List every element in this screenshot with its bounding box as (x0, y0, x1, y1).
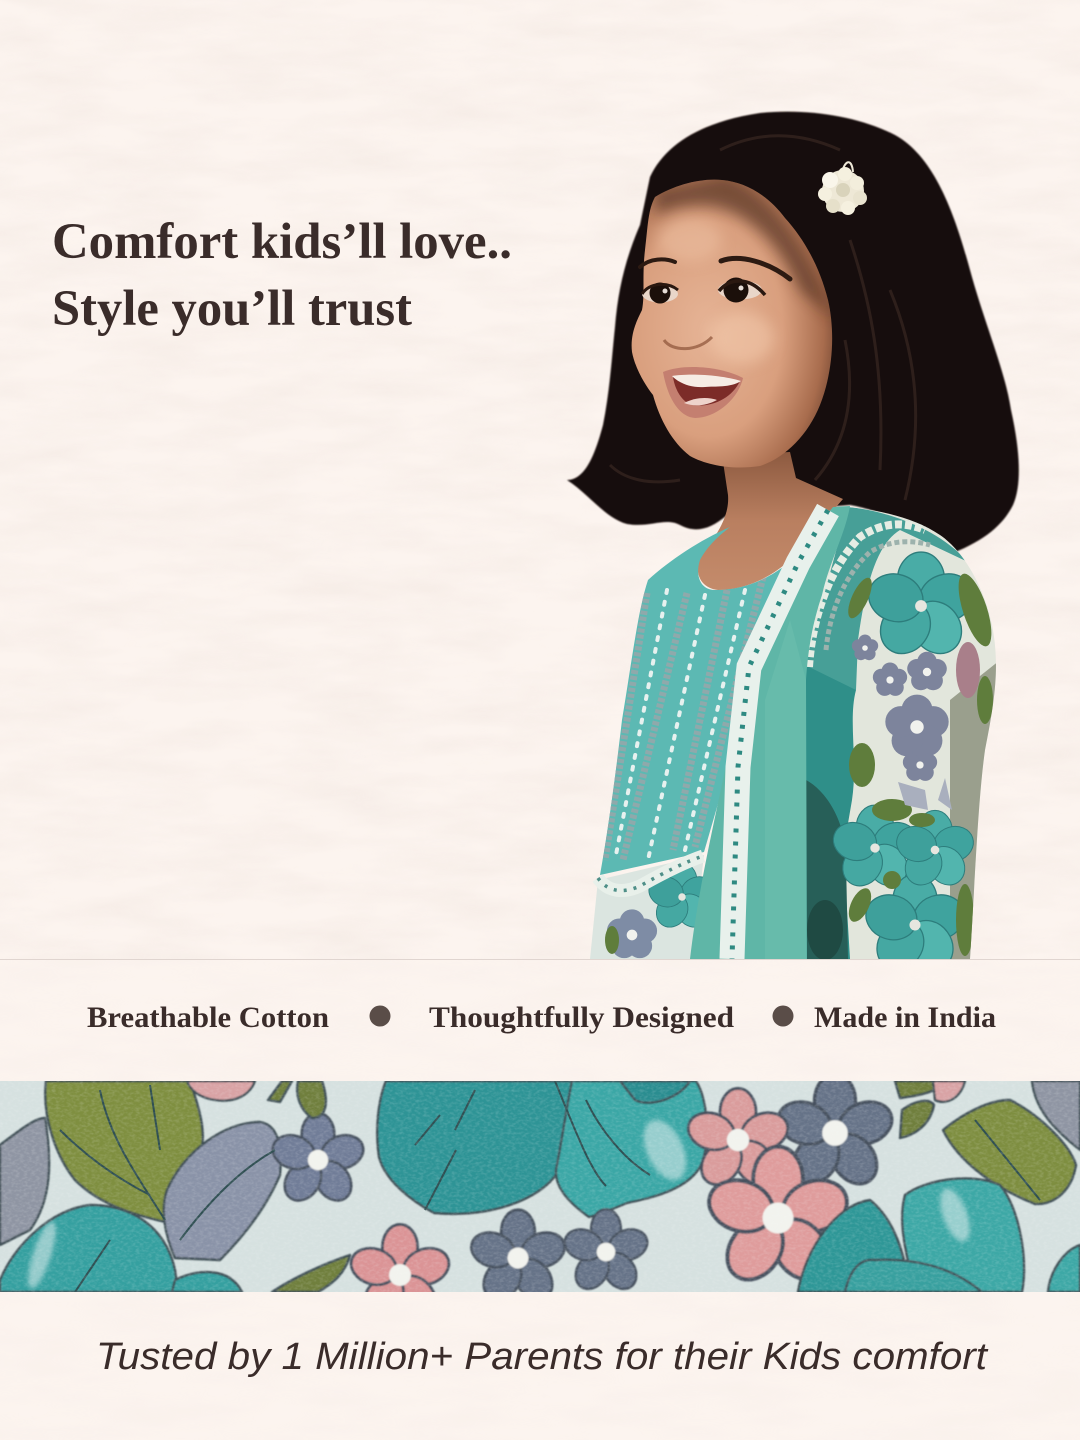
hair pom flower (818, 162, 867, 215)
green sprig (297, 1081, 326, 1118)
teal right petal upper (902, 1178, 1024, 1292)
hair highlights (610, 136, 916, 500)
top right grey leaf (1032, 1081, 1080, 1150)
lace yoke border (598, 856, 703, 891)
dark teal underarm (805, 660, 856, 959)
teal far right (1048, 1245, 1080, 1292)
sprig: bottom green (272, 1255, 350, 1292)
feature: breathable cotton: Breathable Cotton (87, 1001, 329, 1034)
jacket panel (690, 506, 850, 959)
kurta lower print (590, 855, 704, 959)
flower: blue small (268, 1113, 368, 1208)
leaf: large green (45, 1081, 203, 1222)
teal flowers (868, 551, 964, 654)
right shaded edge (950, 660, 1000, 959)
lace shoulder edge (809, 524, 925, 667)
flower: pink lower (703, 1147, 853, 1290)
eyes (642, 278, 765, 304)
pink sprig (956, 642, 980, 698)
divider line above features (0, 959, 1080, 960)
top pink bud right (933, 1081, 965, 1102)
smile (663, 367, 743, 418)
leaf: right narrow green (895, 1081, 945, 1098)
upper sleeve teal yoke (805, 507, 968, 690)
big teal flower right petal (556, 1081, 707, 1217)
feature strip (87, 1001, 996, 1034)
feature: made in india: Made in India (814, 1001, 996, 1034)
blue flowers (852, 634, 949, 781)
leaf: left grey (0, 1118, 49, 1245)
flower: blue bottom (467, 1210, 569, 1307)
leaf: right green (943, 1100, 1076, 1204)
top pink bud (187, 1081, 255, 1101)
neck (698, 452, 843, 590)
teal right petal lower (798, 1200, 910, 1292)
title (52, 214, 512, 337)
petal: bottom left teal (0, 1205, 178, 1292)
leaf: purple (164, 1122, 281, 1260)
sleeve (806, 507, 996, 959)
hair back (567, 112, 1019, 553)
eyebrows (640, 259, 675, 267)
flower: pink bottom (346, 1224, 454, 1326)
kurta yoke (600, 527, 788, 875)
flower: pink upper (683, 1088, 793, 1192)
green leaves (843, 570, 998, 956)
flower: blue bottom right (561, 1209, 651, 1295)
tagline: Tusted by 1 Million+ Parents for their Kids comfort (96, 1336, 989, 1378)
petal lines (60, 1081, 1040, 1292)
bullet dot (772, 1006, 794, 1026)
white lace strip (732, 510, 828, 959)
face (632, 180, 832, 468)
photo: smiling girl in teal floral kurta (567, 112, 1019, 979)
title: Comfort kids’ll love.. (52, 214, 512, 270)
big teal flower left petal (377, 1081, 572, 1214)
bullet dot (370, 1006, 390, 1026)
feature: thoughtfully designed: Thoughtfully Designed (429, 1001, 734, 1034)
floral fabric band (0, 1081, 1080, 1292)
highlights (23, 1113, 976, 1291)
nose (664, 337, 712, 349)
title: Style you’ll trust (52, 281, 412, 337)
fringe shadow on forehead (655, 175, 835, 364)
top petal (620, 1081, 690, 1103)
flower: blue right (777, 1081, 894, 1186)
fabric texture (0, 1081, 1080, 1292)
